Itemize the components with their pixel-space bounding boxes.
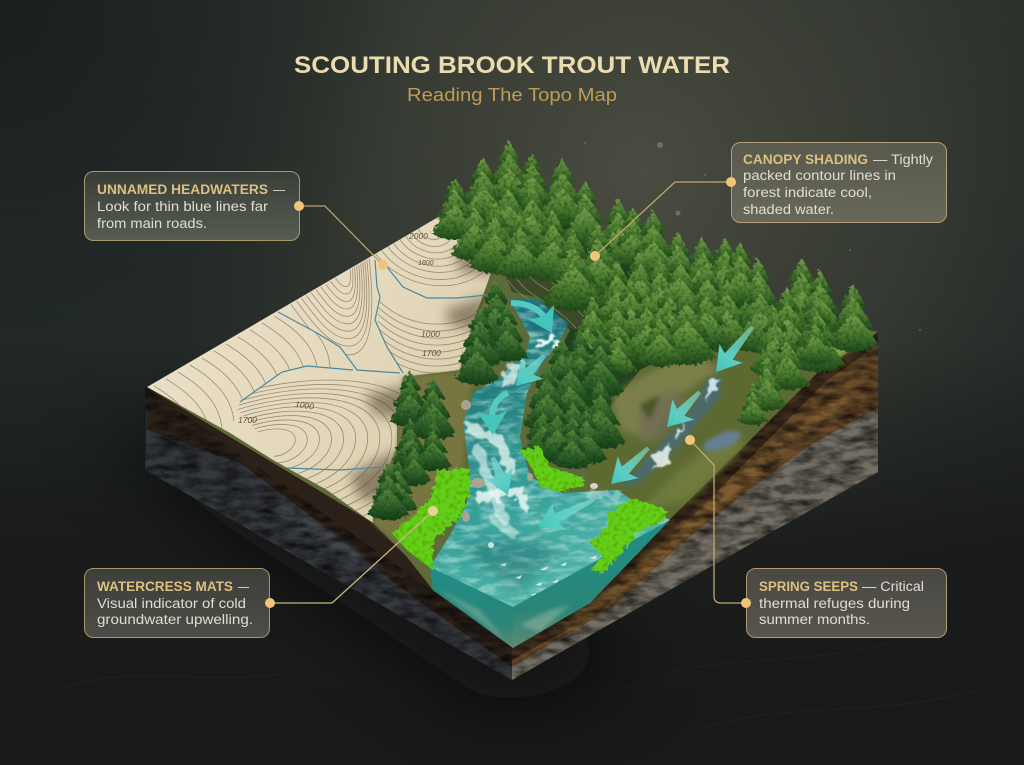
contour lines [154,218,484,516]
leader line [299,206,388,270]
leader line [685,435,746,603]
terrain block [145,140,878,680]
bank trees lower [367,370,456,520]
callout: canopy shading: packed contour lines in [743,168,896,183]
callout: canopy shading: shaded water. [743,202,834,217]
tree shadows on map [350,250,500,500]
central riverside trees [521,330,787,469]
contour elevation labels: 1700 [238,415,257,425]
forest floor [455,188,870,470]
callout: watercress mats: groundwater upwelling. [97,612,253,627]
callout: spring seeps: summer months. [759,612,870,627]
contour elevation labels: 2000 [408,231,428,241]
title: SCOUTING BROOK TROUT WATER [294,52,730,79]
callout: unnamed headwaters: — [273,182,285,197]
flow arrow 4 [479,451,522,501]
flow arrow 2 [505,345,556,396]
contour elevation labels: 1800 [418,260,434,267]
contour elevation labels: 1000 [421,329,440,339]
callout: unnamed headwaters: from main roads. [97,216,207,231]
callout: canopy shading: CANOPY SHADING [743,152,868,167]
contour elevation labels: 1700 [422,348,441,358]
pool cutaway faces [430,520,670,648]
flow arrow 8 [704,317,764,381]
watercress mat: centre [520,447,585,492]
particles [566,142,921,331]
callout: unnamed headwaters: Look for thin blue lines far [97,199,269,214]
contour terrace under canopy [505,250,590,332]
bank trees upper [455,280,528,385]
callout: watercress mats: WATERCRESS MATS [97,579,233,594]
right cross-section [512,332,878,680]
callout: watercress mats [84,506,438,638]
flow arrow 6 [601,437,659,495]
flow arrow 3 [477,393,508,436]
watercress mat: left bank [392,468,470,570]
flow arrow 7 [656,382,711,437]
callout: canopy shading: forest indicate cool, [743,185,872,200]
forest [432,140,878,390]
riverbank soil [373,290,505,545]
callout: watercress mats: — [238,579,249,594]
callout: spring seeps: thermal refuges during [759,596,910,611]
callout: spring seeps [685,435,946,638]
blue streams [240,260,487,470]
boulders [461,400,598,522]
callout: canopy shading [590,142,946,261]
contour elevation labels [238,231,441,425]
topo map surface [147,217,493,523]
flow arrow 1 [511,303,565,340]
river and pool [430,300,670,648]
callout: unnamed headwaters [84,172,388,270]
callout: unnamed headwaters: UNNAMED HEADWATERS [97,182,268,197]
callout: spring seeps: — Critical [862,579,924,594]
watercress mat: right bank [590,498,667,573]
leader line [270,506,438,603]
left cross-section [145,387,512,680]
subtitle: Reading The Topo Map [407,85,617,105]
contour elevation labels: 1000 [294,399,315,412]
rapids [468,340,620,535]
callout: watercress mats: Visual indicator of cold [97,596,246,611]
meadow and spring seeps [585,332,878,517]
callout: canopy shading: — Tightly [873,152,933,167]
callout: spring seeps: SPRING SEEPS [759,579,858,594]
flow arrow 5 [531,487,599,540]
block ground shadow [100,430,640,710]
ground base [147,190,878,647]
leader line [590,182,731,261]
